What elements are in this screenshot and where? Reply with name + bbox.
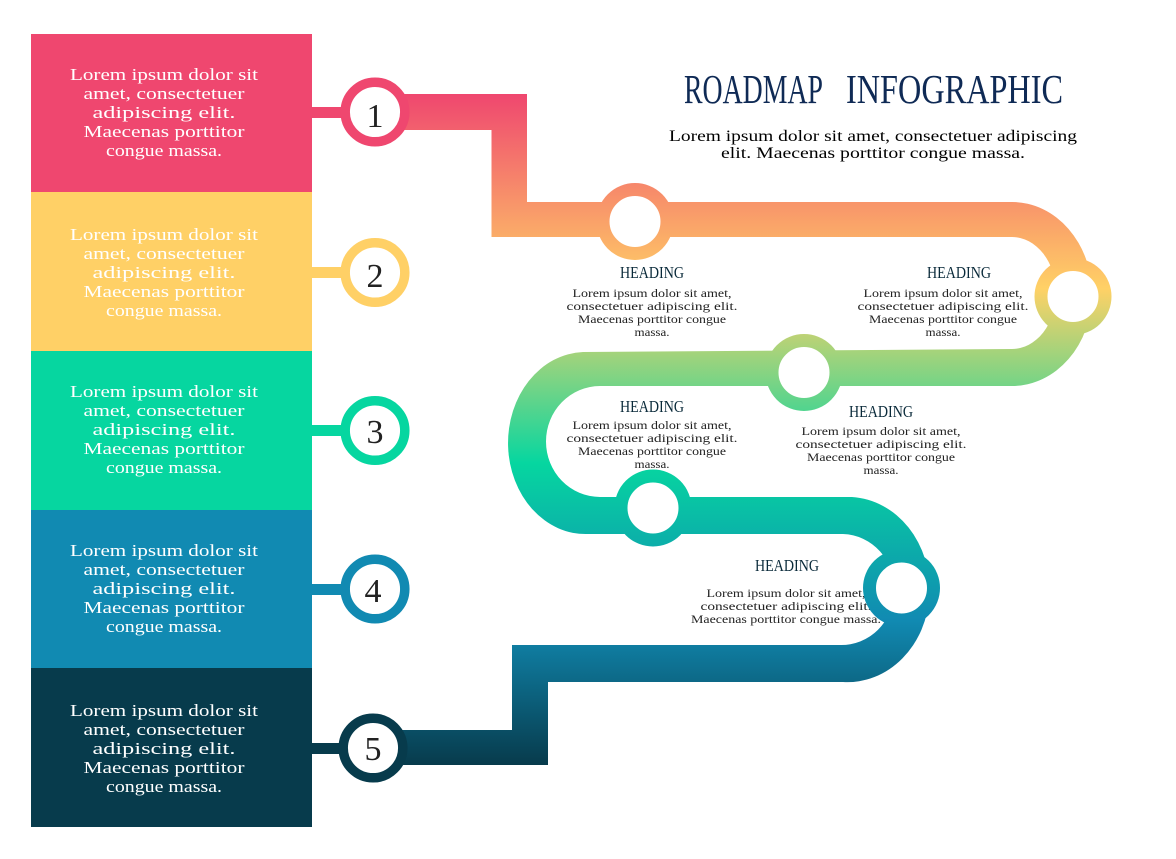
text block: heading 4: consectetuer adipiscing elit. [796, 437, 966, 451]
text block: heading 3: HEADING [620, 397, 684, 416]
road node E [870, 556, 934, 620]
panel 3: congue massa. [106, 458, 222, 477]
panel 1 [31, 34, 312, 192]
text block: heading 2: massa. [926, 325, 960, 339]
text block: heading 5 [691, 556, 881, 626]
panel 1: Lorem ipsum dolor sit [70, 65, 258, 84]
panel 2: Maecenas porttitor [84, 282, 245, 301]
text block: heading 5: HEADING [755, 556, 819, 575]
road node C [772, 340, 836, 404]
text block: heading 1: massa. [634, 325, 670, 339]
number marker 5: 5 [364, 731, 382, 768]
text block: heading 3: massa. [634, 457, 670, 471]
road node B [1041, 264, 1105, 328]
panel 1: congue massa. [106, 141, 222, 160]
panel 5: congue massa. [106, 777, 222, 796]
panel 5 [31, 668, 312, 827]
panel 2 [31, 192, 312, 351]
panel 4 [31, 510, 312, 668]
panel 3: adipiscing elit. [92, 420, 236, 439]
text block: heading 2: consectetuer adipiscing elit. [858, 299, 1028, 313]
panel 2: congue massa. [106, 301, 222, 320]
number marker 5 [312, 718, 403, 778]
panel 5: Maecenas porttitor [84, 758, 245, 777]
text block: heading 5: Maecenas porttitor congue massa. [691, 612, 881, 626]
text block: heading 2: HEADING [927, 263, 991, 282]
text block: heading 2: Lorem ipsum dolor sit amet, [864, 286, 1022, 300]
subtitle [669, 128, 1077, 162]
panel 4: Lorem ipsum dolor sit [70, 541, 258, 560]
panel 2: amet, consectetuer [84, 244, 245, 263]
number marker 3 [312, 401, 405, 460]
number marker 4: 4 [364, 573, 382, 610]
text block: heading 4: massa. [864, 463, 898, 477]
text block: heading 3: Lorem ipsum dolor sit amet, [572, 418, 732, 432]
panel 4: congue massa. [106, 617, 222, 636]
text block: heading 5: Lorem ipsum dolor sit amet, [706, 586, 866, 600]
number marker 1: 1 [366, 98, 384, 135]
subtitle: elit. Maecenas porttitor congue massa. [721, 145, 1025, 162]
text block: heading 2: Maecenas porttitor congue [869, 312, 1017, 326]
title [684, 66, 1063, 112]
text block: heading 1: Lorem ipsum dolor sit amet, [572, 286, 732, 300]
number marker 2: 2 [366, 258, 384, 295]
winding road [375, 94, 1092, 765]
text block: heading 3: Maecenas porttitor congue [578, 444, 726, 458]
title: INFOGRAPHIC [846, 66, 1063, 112]
panel 3: amet, consectetuer [84, 401, 245, 420]
text block: heading 3 [566, 397, 738, 471]
panel 5: adipiscing elit. [92, 739, 236, 758]
text block: heading 4: Lorem ipsum dolor sit amet, [802, 424, 960, 438]
number marker 2 [312, 243, 405, 302]
panel 3: Maecenas porttitor [84, 439, 245, 458]
text block: heading 1: HEADING [620, 263, 684, 282]
panel 5: amet, consectetuer [84, 720, 245, 739]
title: ROADMAP [684, 66, 823, 112]
text block: heading 1 [566, 263, 738, 339]
number marker 4 [312, 559, 405, 619]
panel 1: amet, consectetuer [84, 84, 245, 103]
text block: heading 4: HEADING [849, 402, 913, 421]
panel 2: adipiscing elit. [92, 263, 236, 282]
panel 5: Lorem ipsum dolor sit [70, 701, 258, 720]
panel 4: adipiscing elit. [92, 579, 236, 598]
text block: heading 2 [858, 263, 1028, 339]
road node A [603, 190, 667, 254]
number marker 1 [312, 82, 405, 142]
panel 2: Lorem ipsum dolor sit [70, 225, 258, 244]
text block: heading 1: Maecenas porttitor congue [578, 312, 726, 326]
panel 4: amet, consectetuer [84, 560, 245, 579]
panel 4: Maecenas porttitor [84, 598, 245, 617]
text block: heading 4: Maecenas porttitor congue [807, 450, 955, 464]
panel 1: adipiscing elit. [92, 103, 236, 122]
number marker 3: 3 [366, 414, 384, 451]
road node D [621, 476, 685, 540]
text block: heading 3: consectetuer adipiscing elit. [566, 431, 738, 445]
text block: heading 5: consectetuer adipiscing elit. [700, 599, 872, 613]
subtitle: Lorem ipsum dolor sit amet, consectetuer adipiscing [669, 128, 1077, 145]
panel 3 [31, 351, 312, 510]
panel 1: Maecenas porttitor [84, 122, 245, 141]
text block: heading 4 [796, 402, 966, 477]
panel 3: Lorem ipsum dolor sit [70, 382, 258, 401]
text block: heading 1: consectetuer adipiscing elit. [566, 299, 738, 313]
